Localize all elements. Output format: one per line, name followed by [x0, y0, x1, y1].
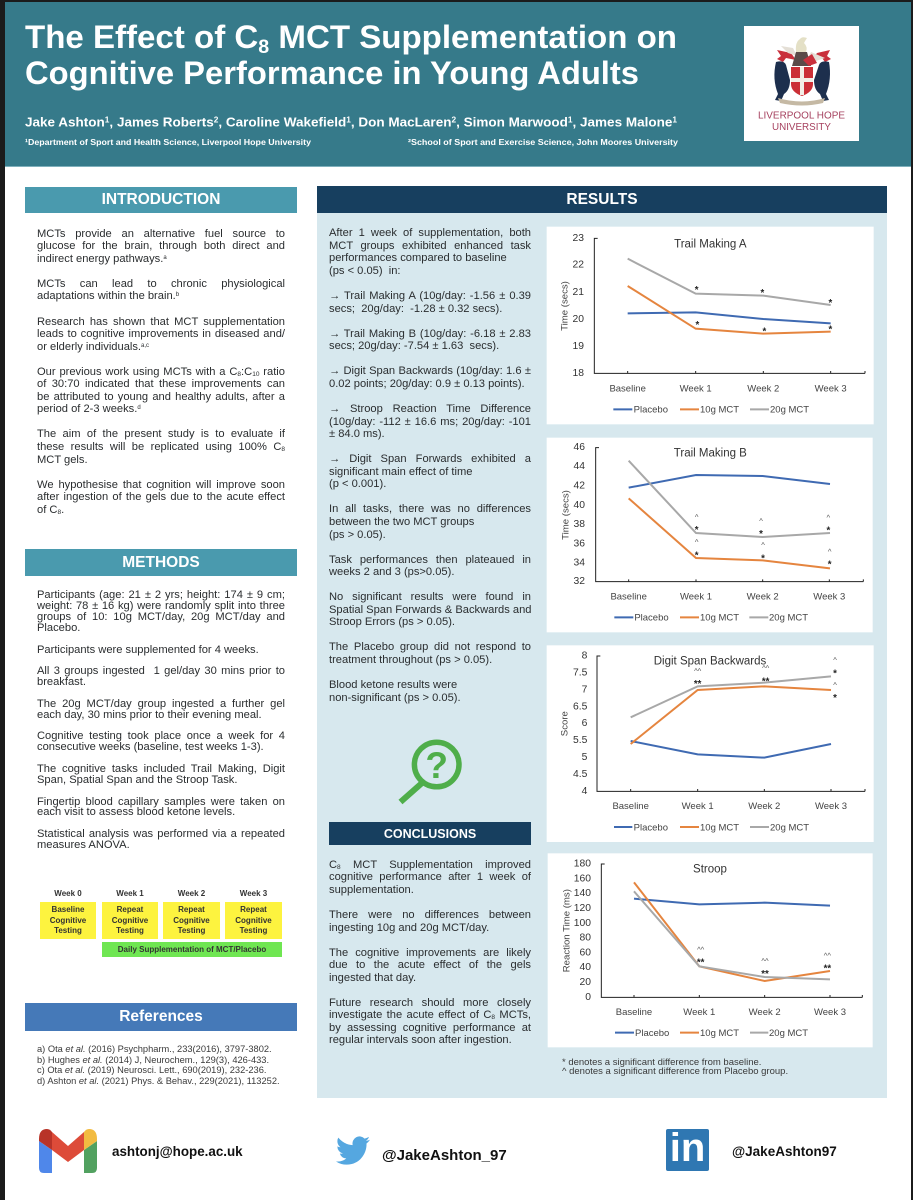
text block: conclusions: regular intervals soon after ingestion.: [329, 1034, 512, 1046]
text block: results findings: → Digit Span Forwards exhibited a: [329, 453, 531, 465]
text block: conclusions: ingesting 10g and 20g MCT/day.: [329, 922, 489, 934]
chart: Digit Span Backwards: [546, 645, 874, 842]
text block: introduction: MCTs provide an alternative fuel source to: [37, 228, 285, 240]
week 1 column: [102, 889, 158, 939]
chart: Trail Making B: *: [761, 553, 765, 564]
text block: introduction: leads to cognitive improvements in diseased and/: [37, 328, 285, 340]
chart: Trail Making A: 20: [572, 314, 584, 325]
text block: results findings: Blood ketone results were: [329, 679, 457, 691]
text block: methods: Statistical analysis was performed via a repeated: [37, 828, 285, 840]
week 2 column: Cognitive: [173, 916, 210, 924]
chart: Stroop: **: [824, 964, 831, 975]
week 0 column: Week 0: [54, 889, 82, 898]
week 3 column: Week 3: [240, 889, 267, 898]
title: , Caroline Wakefield: [218, 114, 346, 130]
chart: Stroop: 120: [574, 903, 591, 914]
text block: results findings: treatment throughout (ps > 0.05).: [329, 654, 492, 666]
text block: introduction: be attributed to young and healthy adults, after a: [37, 391, 285, 403]
title: 2: [214, 116, 219, 124]
text block: conclusions: ingested that day.: [329, 972, 416, 984]
chart: Trail Making B: ^: [761, 541, 765, 550]
chart: Digit Span Backwards: Score: [560, 711, 571, 736]
heading: introduction: INTRODUCTION: [102, 191, 220, 208]
chart: Trail Making A: Baseline: [609, 384, 646, 395]
chart: Stroop: ^^: [697, 945, 705, 954]
chart: Digit Span Backwards: Placebo: [634, 822, 668, 833]
chart: Digit Span Backwards: Week 2: [748, 801, 780, 812]
text block: results findings: [329, 227, 532, 704]
text block: introduction: Research has shown that MCT supplementation: [37, 316, 285, 328]
chart: Trail Making A: Placebo: [634, 405, 668, 416]
text block: methods: All 3 groups ingested 1 gel/day 30 mins prior to: [37, 665, 285, 677]
chart: Trail Making A: 20g MCT: [770, 405, 809, 416]
week 3 column: Testing: [240, 926, 267, 935]
chart: Trail Making A: 23: [572, 233, 584, 244]
logo: Liverpool Hope University crest: UNIVERSITY: [772, 122, 831, 133]
chart: Trail Making B: ^: [828, 547, 832, 556]
text block: methods: breakfast.: [37, 676, 86, 688]
chart: Trail Making B: *: [826, 526, 830, 537]
chart: Trail Making B: *: [695, 550, 699, 561]
text block: results findings: (p < 0.001).: [329, 478, 386, 490]
title: , Don MacLaren: [351, 114, 452, 130]
chart: Digit Span Backwards: 8: [582, 650, 588, 662]
text block: results findings: The Placebo group did not respond to: [329, 641, 531, 653]
icon: twitter bird: [336, 1136, 370, 1165]
chart: Trail Making B: *: [828, 560, 832, 571]
chart: Trail Making A: Time (secs): [560, 281, 571, 331]
chart: Digit Span Backwards: 10g MCT: [700, 822, 739, 833]
chart: Digit Span Backwards: 5: [582, 752, 588, 763]
chart: Trail Making B: ^: [695, 538, 699, 547]
chart: Trail Making B: 42: [574, 480, 585, 492]
week 1 column: Week 1: [116, 889, 144, 898]
title: MCT Supplementation on: [269, 19, 677, 55]
week 0 column: Testing: [54, 926, 82, 935]
logo: Liverpool Hope University crest: LIVERPOOL HOPE: [758, 110, 845, 122]
text block: introduction: Our previous work using MCTs with a C8:C10 ratio: [37, 366, 285, 378]
text block: results findings: (10g/day: -112 ± 16.6 ms; 20g/day: -101: [329, 416, 531, 428]
contact: twitter handle: @JakeAshton_97: [382, 1147, 507, 1164]
text block: references: c) Ota et al. (2019) Neurosci. Lett., 690(2019), 232-236.: [37, 1065, 266, 1075]
text block: methods: groups of 10: 10g MCT/day, 20g MCT/day and: [37, 611, 285, 623]
text block: results findings: secs; 20g/day: -7.54 ± 1.63 secs).: [329, 340, 499, 352]
text block: results findings: performances compared to baseline: [329, 252, 507, 264]
chart: Digit Span Backwards: Week 3: [815, 801, 847, 812]
chart: Stroop: 10g MCT: [700, 1028, 739, 1039]
text block: results findings: → Stroop Reaction Time Difference: [329, 403, 531, 415]
text block: conclusions: cognitive performance after 1 week of: [329, 871, 531, 883]
chart footnote: * denotes a significant difference from baseline.: [562, 1056, 761, 1068]
title: 1: [672, 116, 678, 124]
chart: Trail Making B: *: [759, 529, 763, 540]
text block: conclusions: by assessing cognitive performance at: [329, 1022, 531, 1034]
chart: Stroop: 60: [580, 948, 591, 958]
text block: methods: Participants (age: 21 ± 2 yrs; height: 174 ± 9 cm;: [37, 589, 285, 601]
text block: results findings: No significant results were found in: [329, 591, 531, 603]
text block: introduction: of 30:70 indicated that these improvements can: [37, 378, 285, 390]
chart: Trail Making A: *: [828, 298, 832, 309]
text block: references: d) Ashton et al. (2021) Phys. & Behav., 229(2021), 113252.: [37, 1076, 280, 1086]
chart: Stroop: 80: [580, 932, 591, 944]
title: 1: [105, 116, 110, 124]
chart: Stroop: 40: [580, 962, 591, 973]
chart: Stroop: 180: [574, 858, 591, 870]
title: ¹Department of Sport and Health Science, Liverpool Hope University: [25, 137, 311, 147]
chart: Trail Making B: ^: [695, 512, 699, 521]
chart: Trail Making B: 40: [574, 500, 585, 511]
chart: Trail Making B: Week 3: [813, 592, 845, 603]
text block: results findings: MCT groups exhibited enhanced task: [329, 240, 531, 252]
week 2 column: Repeat: [178, 905, 205, 914]
text block: methods: consecutive weeks (baseline, test weeks 1-3).: [37, 741, 264, 753]
chart: Trail Making A: *: [695, 320, 699, 331]
title: 2: [451, 116, 457, 124]
chart: Stroop: Week 2: [749, 1007, 781, 1018]
week 1 column: Cognitive: [112, 916, 148, 924]
text block: methods: each day, 30 mins prior to their evening meal.: [37, 709, 262, 721]
week 2 column: Testing: [178, 926, 205, 935]
text block: references: [37, 1044, 280, 1086]
chart: Digit Span Backwards: 5.5: [573, 735, 588, 746]
text block: methods: [37, 589, 285, 851]
title: , James Malone: [573, 114, 672, 130]
chart: Digit Span Backwards: Digit Span Backwards: [654, 655, 766, 667]
chart: Trail Making B: 44: [574, 461, 585, 472]
chart: Trail Making B: ^: [759, 516, 763, 525]
text block: methods: Participants were supplemented for 4 weeks.: [37, 644, 259, 656]
text block: introduction: MCT gels.: [37, 454, 88, 466]
heading: references: References: [119, 1008, 203, 1025]
text block: introduction: after ingestion of the gels due to the acute effect: [37, 491, 285, 503]
chart: Stroop: Stroop: [693, 863, 727, 875]
chart: Trail Making A: Week 1: [680, 384, 712, 395]
chart: Trail Making B: ^: [827, 513, 831, 522]
chart: Digit Span Backwards: ^: [833, 655, 837, 664]
timeline: study design: [40, 889, 282, 957]
chart: Digit Span Backwards: 20g MCT: [770, 822, 809, 833]
title: 8: [258, 37, 269, 58]
chart: Trail Making A: [546, 226, 874, 424]
text block: conclusions: There were no differences between: [329, 909, 531, 921]
text block: introduction: period of 2-3 weeks.d: [37, 403, 141, 415]
chart: Stroop: Placebo: [635, 1028, 669, 1039]
week 3 column: Cognitive: [235, 916, 272, 924]
chart: Stroop: ^^: [824, 951, 831, 960]
chart: Trail Making A: 22: [572, 260, 584, 270]
text block: methods: Fingertip blood capillary samples were taken on: [37, 796, 285, 808]
text block: methods: measures ANOVA.: [37, 839, 130, 851]
chart: Trail Making B: Week 2: [747, 592, 779, 603]
text block: methods: The 20g MCT/day group ingested a further gel: [37, 698, 285, 710]
chart: Trail Making A: 18: [572, 368, 584, 379]
chart: Trail Making B: 36: [574, 538, 585, 550]
chart: Digit Span Backwards: 7: [582, 684, 588, 696]
text block: references: b) Hughes et al. (2014) J, Neurochem., 129(3), 426-433.: [37, 1055, 269, 1065]
text block: results findings: After 1 week of supplementation, both: [329, 227, 531, 239]
text block: results findings: between the two MCT groups: [329, 516, 474, 528]
chart: Digit Span Backwards: 6: [582, 718, 588, 729]
chart: Trail Making B: Placebo: [634, 613, 669, 624]
text block: methods: weight: 78 ± 16 kg) were randomly split into three: [37, 600, 285, 612]
chart: Trail Making B: 38: [574, 519, 585, 530]
chart: Trail Making A: *: [762, 327, 766, 338]
chart: Digit Span Backwards: 6.5: [573, 702, 588, 712]
week 2 column: Week 2: [178, 889, 205, 898]
chart: Stroop: Week 3: [814, 1007, 846, 1018]
chart: Trail Making A: 21: [572, 287, 584, 298]
title: 1: [568, 116, 573, 124]
text block: introduction: indirect energy pathways.a: [37, 253, 167, 265]
header banner: [5, 2, 911, 167]
text block: results findings: weeks 2 and 3 (ps>0.05).: [329, 566, 454, 578]
text block: conclusions: Future research should more closely: [329, 997, 531, 1009]
chart: Digit Span Backwards: ^: [833, 680, 837, 689]
text block: introduction: of C8.: [37, 504, 64, 516]
week 0 column: Baseline: [52, 905, 84, 914]
week 1 column: Repeat: [117, 905, 143, 914]
heading: methods: [25, 549, 297, 576]
chart: Trail Making A: 10g MCT: [700, 405, 739, 416]
text block: results findings: → Digit Span Backwards (10g/day: 1.6 ±: [329, 365, 531, 377]
title: , James Roberts: [109, 114, 214, 130]
week 3 column: Repeat: [240, 905, 267, 914]
heading: references: [25, 1003, 297, 1031]
chart: Stroop: 160: [574, 874, 591, 884]
text block: results findings: Stroop Errors (ps > 0.05).: [329, 616, 455, 628]
text block: results findings: In all tasks, there was no differences: [329, 503, 531, 515]
text block: introduction: glucose for the brain, through both direct and: [37, 240, 285, 252]
supplementation bar: [102, 942, 282, 957]
chart: Digit Span Backwards: 4: [582, 786, 588, 797]
text block: conclusions: The cognitive improvements are likely: [329, 947, 531, 959]
chart: Digit Span Backwards: ^^: [762, 664, 770, 673]
chart: Trail Making A: *: [760, 288, 764, 299]
chart: Stroop: [548, 853, 873, 1048]
text block: introduction: The aim of the present study is to evaluate if: [37, 428, 285, 440]
text block: references: a) Ota et al. (2016) Psychpharm., 233(2016), 3797-3802.: [37, 1044, 272, 1054]
title: [25, 19, 678, 147]
chart: Trail Making A: Trail Making A: [674, 238, 747, 250]
text block: results findings: 0.02 points; 20g/day: 0.9 ± 0.13 points).: [329, 378, 525, 390]
text block: introduction: or elderly individuals.a,c: [37, 341, 149, 353]
text block: introduction: We hypothesise that cognition will improve soon: [37, 479, 285, 491]
text block: introduction: MCTs can lead to chronic physiological: [37, 278, 285, 290]
text block: conclusions: [329, 859, 531, 1046]
chart: Trail Making B: Baseline: [610, 592, 647, 603]
chart: Digit Span Backwards: **: [694, 679, 702, 690]
icon: magnifying glass with question mark: [398, 740, 462, 804]
chart: Trail Making B: *: [695, 525, 699, 536]
text block: conclusions: investigate the acute effect of C8 MCTs,: [329, 1009, 531, 1021]
text block: methods: Placebo.: [37, 622, 80, 634]
week 3 column: [225, 889, 282, 939]
text block: results findings: (ps < 0.05) in:: [329, 265, 401, 277]
title: , Simon Marwood: [456, 114, 568, 130]
supplementation bar: Daily Supplementation of MCT/Placebo: [118, 945, 266, 954]
week 1 column: Testing: [116, 926, 144, 935]
week 2 column: [163, 889, 220, 939]
chart: Digit Span Backwards: **: [762, 676, 770, 687]
text block: results findings: secs; 20g/day: -1.28 ± 0.32 secs).: [329, 303, 502, 315]
chart: Stroop: 20: [580, 977, 591, 988]
chart: Trail Making B: Trail Making B: [674, 448, 747, 460]
heading: results: [317, 186, 887, 213]
chart: Digit Span Backwards: *: [833, 693, 837, 704]
chart: Stroop: Baseline: [616, 1007, 652, 1018]
text block: methods: Cognitive testing took place once a week for 4: [37, 730, 285, 742]
title: ²School of Sport and Exercise Science, John Moores University: [408, 137, 678, 147]
heading: introduction: [25, 187, 297, 213]
chart: Trail Making B: 46: [574, 442, 585, 453]
text block: introduction: adaptations within the brain.b: [37, 290, 179, 302]
week 0 column: Cognitive: [50, 916, 86, 924]
chart: Stroop: 20g MCT: [769, 1028, 808, 1039]
text block: results findings: (ps > 0.05).: [329, 529, 386, 541]
icon: gmail: [39, 1129, 97, 1173]
heading: methods: METHODS: [122, 554, 200, 570]
text block: results findings: → Trail Making B (10g/day: -6.18 ± 2.83: [329, 328, 531, 340]
chart: Trail Making B: [546, 438, 873, 632]
heading: conclusions: [329, 822, 531, 845]
heading: conclusions: CONCLUSIONS: [384, 826, 476, 840]
chart: Stroop: **: [697, 958, 705, 969]
chart: Trail Making A: *: [695, 285, 699, 296]
chart footnote: [562, 1056, 788, 1077]
chart: Trail Making A: 19: [572, 341, 584, 352]
title: 1: [346, 116, 351, 124]
text block: results findings: non-significant (ps > 0.05).: [329, 692, 461, 704]
title: The Effect of C: [25, 19, 251, 55]
text block: results findings: Task performances then plateaued in: [329, 554, 531, 566]
chart: Trail Making B: 10g MCT: [700, 613, 739, 624]
chart: Trail Making A: Week 3: [815, 384, 847, 395]
contact: email: ashtonj@hope.ac.uk: [112, 1144, 243, 1159]
text block: results findings: → Trail Making A (10g/day: -1.56 ± 0.39: [329, 290, 531, 302]
text block: results findings: Spatial Span Forwards & Backwards and: [329, 604, 532, 616]
contact: linkedin handle: @JakeAshton97: [732, 1144, 837, 1159]
chart: Trail Making B: 20g MCT: [769, 613, 808, 624]
chart: Trail Making B: 32: [574, 576, 585, 587]
text block: conclusions: supplementation.: [329, 884, 414, 896]
chart: Digit Span Backwards: ^^: [694, 666, 702, 675]
title: Cognitive Performance in Young Adults: [25, 55, 639, 91]
icon: magnifying glass with question mark: ?: [425, 745, 448, 786]
chart: Digit Span Backwards: Baseline: [612, 801, 649, 812]
text block: methods: Span, Spatial Span and the Stroop Task.: [37, 774, 237, 786]
chart: Stroop: 140: [574, 888, 591, 899]
text block: results findings: ± 84.0 ms).: [329, 428, 385, 440]
chart: Stroop: 100: [574, 918, 591, 929]
chart: Digit Span Backwards: *: [833, 669, 837, 680]
chart: Trail Making B: Week 1: [680, 592, 712, 603]
chart: Trail Making B: 34: [574, 558, 585, 568]
panel: results: [317, 186, 887, 1098]
chart: Digit Span Backwards: 4.5: [573, 769, 588, 780]
text block: introduction: these results will be replicated using 100% C8: [37, 441, 285, 453]
text block: methods: each visit to assess blood ketone levels.: [37, 806, 235, 818]
chart: Stroop: **: [761, 969, 769, 980]
chart footnote: ^ denotes a significant difference from Placebo group.: [562, 1066, 788, 1077]
text block: conclusions: C8 MCT Supplementation improved: [329, 859, 531, 871]
chart: Digit Span Backwards: Week 1: [682, 801, 714, 812]
chart: Digit Span Backwards: 7.5: [573, 668, 588, 678]
chart: Trail Making A: Week 2: [747, 384, 779, 395]
chart: Stroop: Week 1: [683, 1007, 715, 1018]
logo: Liverpool Hope University crest: [744, 26, 859, 141]
heading: results: RESULTS: [566, 190, 638, 208]
chart: Trail Making A: *: [828, 325, 832, 336]
title: Jake Ashton: [25, 114, 102, 130]
week 0 column: [40, 889, 96, 939]
chart: Stroop: 0: [585, 992, 591, 1003]
text block: introduction: [37, 228, 285, 516]
text block: conclusions: due to the acute effect of the gels: [329, 959, 531, 971]
chart: Stroop: ^^: [761, 957, 769, 966]
text block: results findings: significant main effect of time: [329, 466, 472, 478]
chart: Trail Making B: Time (secs): [561, 490, 572, 540]
chart: Stroop: Reaction Time (ms): [561, 889, 572, 972]
text block: methods: The cognitive tasks included Trail Making, Digit: [37, 763, 285, 775]
